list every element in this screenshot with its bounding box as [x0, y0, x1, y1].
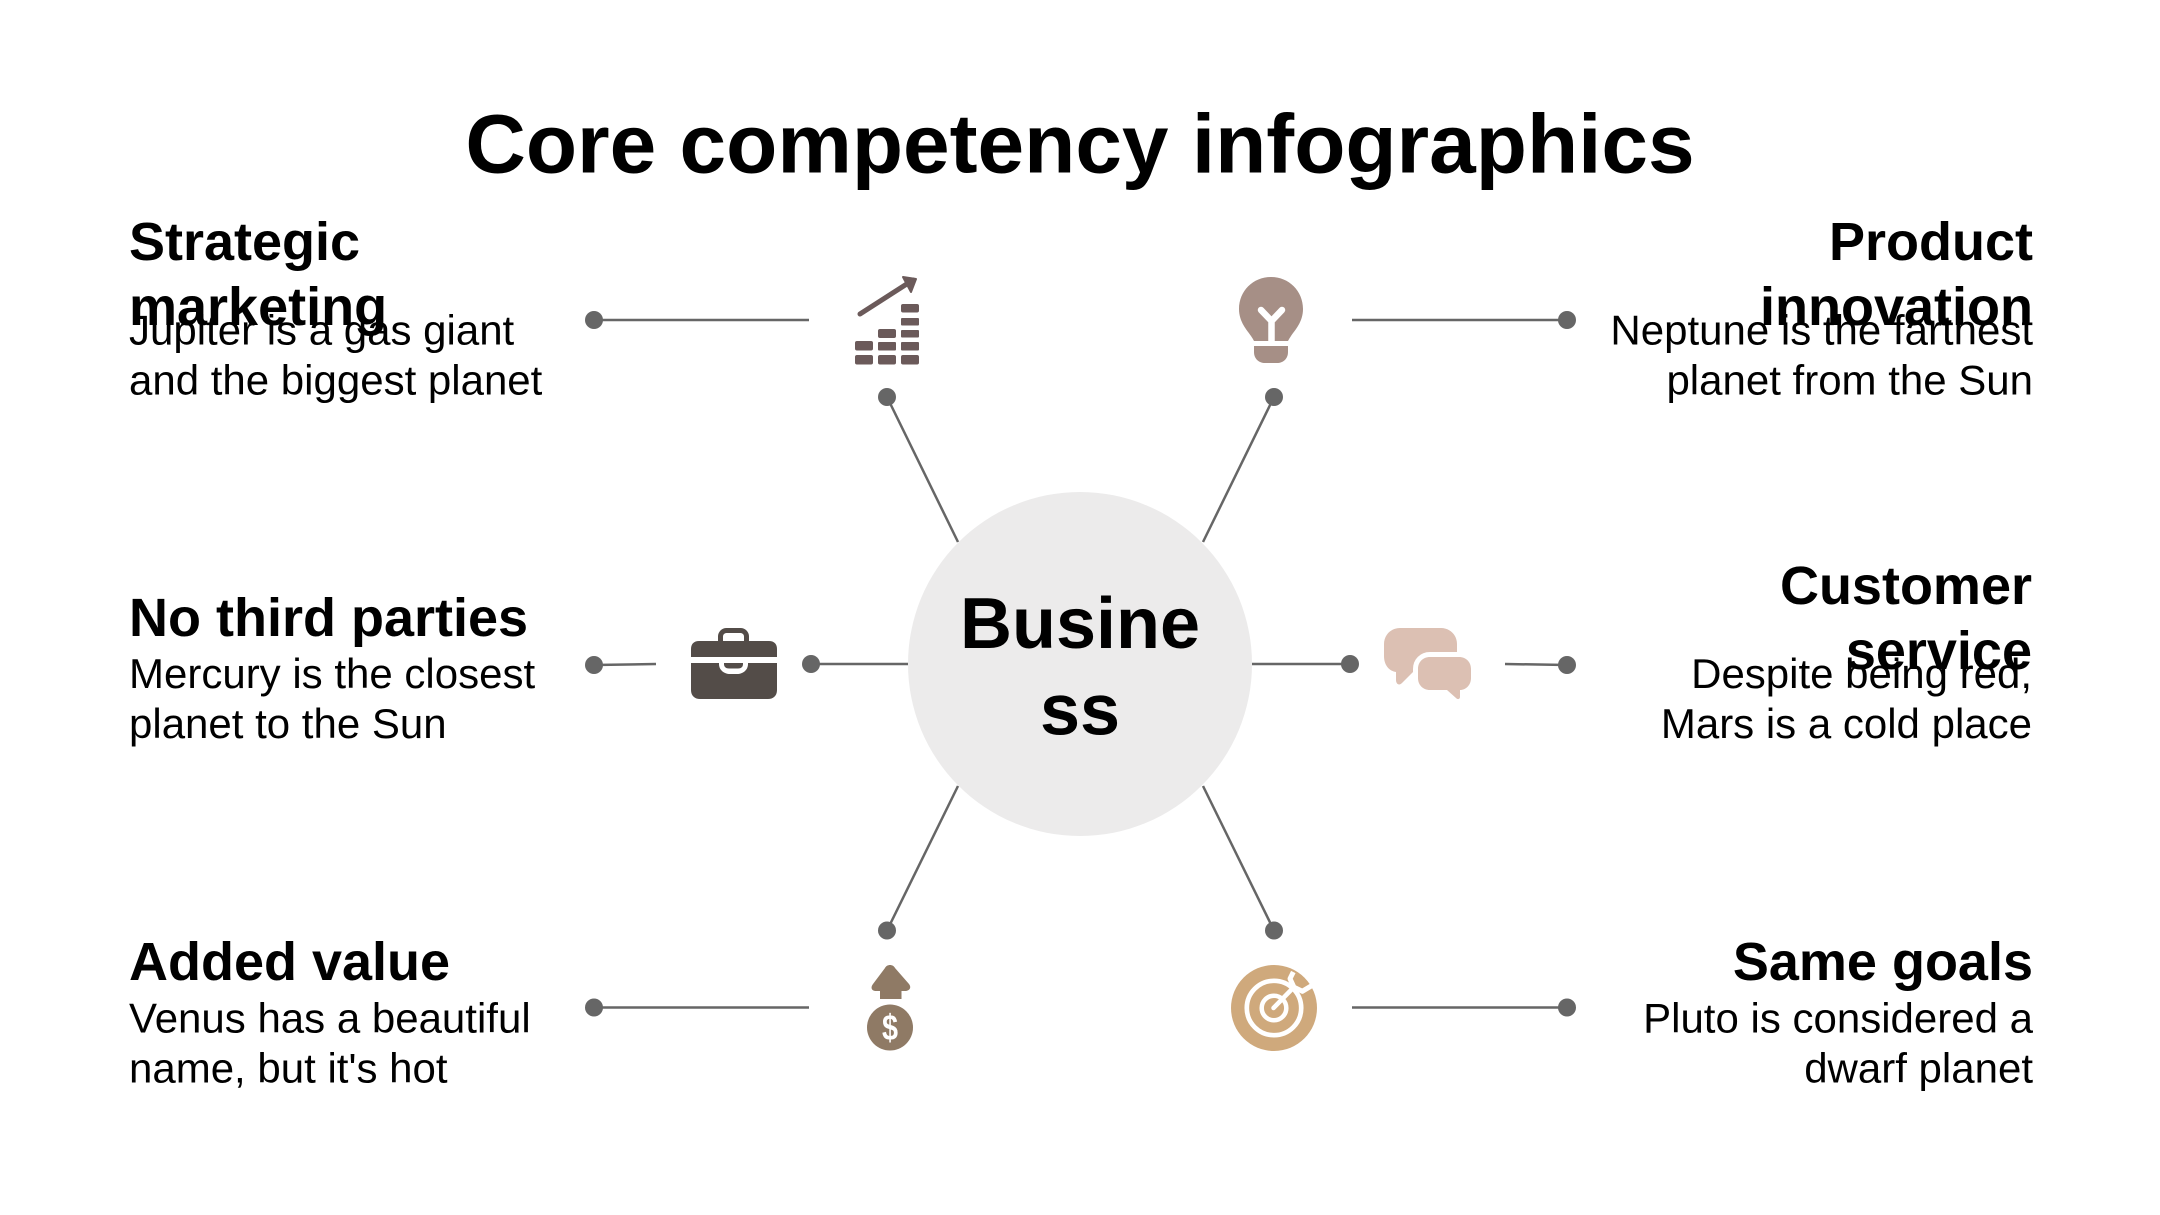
icon: growth chart — [855, 277, 919, 364]
description: Pluto is considered a — [1643, 994, 2033, 1042]
panel: added value text — [129, 932, 531, 1092]
panel: product innovation text — [1610, 212, 2033, 404]
icon: money with up arrow: $ — [882, 1007, 898, 1048]
heading: marketing — [129, 277, 387, 337]
icon: money with up arrow — [867, 965, 913, 1050]
description: name, but it's hot — [129, 1044, 448, 1092]
connector: strategic marketing icon to hub — [878, 388, 958, 542]
heading: No third parties — [129, 588, 528, 648]
description: Despite being red, — [1691, 650, 2032, 697]
connector: same goals icon to hub — [1203, 786, 1283, 940]
heading: innovation — [1760, 277, 2033, 337]
heading: Same goals — [1733, 932, 2033, 992]
icon: target with dart — [1231, 965, 1317, 1051]
heading: Strategic — [129, 212, 360, 272]
description: Venus has a beautiful — [129, 994, 531, 1042]
heading: Added value — [129, 932, 450, 992]
panel: same goals text — [1643, 932, 2034, 1092]
heading: service — [1846, 621, 2032, 681]
connector: customer service hub to icon — [1252, 655, 1359, 673]
panel: strategic marketing text — [129, 212, 543, 404]
description: dwarf planet — [1804, 1044, 2033, 1092]
description: Neptune is the farthest — [1610, 306, 2033, 354]
connector: no third parties text to icon — [585, 656, 656, 674]
description: planet to the Sun — [129, 700, 447, 747]
hub label: Busine — [960, 584, 1200, 664]
panel: no third parties text — [129, 588, 535, 747]
connector: product innovation icon to hub — [1203, 388, 1283, 542]
icon: briefcase — [691, 630, 777, 699]
description: Jupiter is a gas giant — [129, 306, 514, 354]
description: and the biggest planet — [129, 356, 543, 404]
icon: light bulb — [1239, 277, 1303, 363]
connector: product innovation text to icon — [1352, 311, 1576, 329]
connector: added value text to icon — [585, 998, 809, 1016]
description: Mercury is the closest — [129, 650, 535, 697]
hub circle — [908, 492, 1252, 836]
heading: Product — [1829, 212, 2033, 272]
description: planet from the Sun — [1666, 356, 2033, 404]
icon: chat bubbles — [1384, 628, 1471, 699]
connector: strategic marketing text to icon — [585, 311, 809, 329]
connector: same goals text to icon — [1352, 998, 1576, 1016]
title: Core competency infographics — [465, 96, 1695, 190]
description: Mars is a cold place — [1661, 700, 2032, 747]
connector: added value icon to hub — [878, 786, 958, 940]
connector: customer service icon to text — [1505, 656, 1576, 674]
hub label: ss — [1040, 670, 1120, 750]
panel: central hub — [908, 492, 1252, 836]
connector: no third parties icon to hub — [802, 655, 908, 673]
panel: customer service text — [1661, 556, 2032, 747]
heading: Customer — [1780, 556, 2032, 616]
